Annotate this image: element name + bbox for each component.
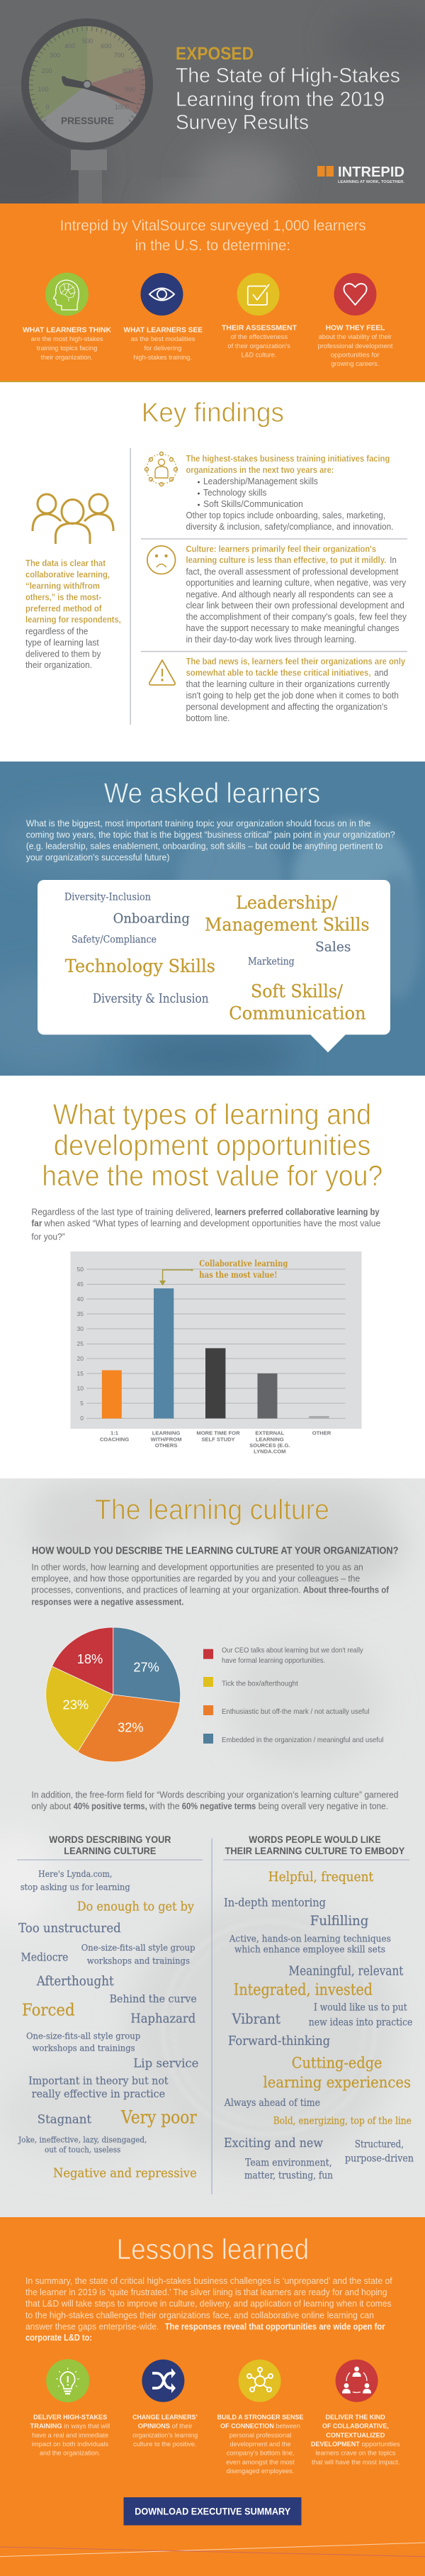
item: change learners' opinions — [132, 2360, 198, 2448]
text: culture explanation: About three-fourths of — [303, 1584, 390, 1595]
text: bad news finding: and — [374, 668, 388, 678]
item: how they feel — [317, 273, 393, 368]
column: words people would like: Bold, energizing, top of the line — [273, 2115, 412, 2126]
item: build connection — [217, 2360, 303, 2475]
text: chart intro — [31, 1208, 380, 1242]
column: words describing your learning culture: Behind the curve — [110, 1992, 197, 2005]
text: collaborative learning finding: delivered to them by — [26, 649, 101, 659]
column: words people would like: new ideas into practice — [309, 2017, 412, 2028]
text: collaborative learning finding: The data is clear that — [26, 558, 106, 568]
text: collaborative learning finding — [26, 558, 121, 670]
heading: what types of learning: development opportunities — [54, 1129, 371, 1161]
column: words people would like: In-depth mentoring — [224, 1896, 326, 1909]
text: chart intro: far — [31, 1219, 42, 1229]
column: words describing your learning culture: Haphazard — [130, 2012, 196, 2026]
heading: survey intro: in the U.S. to determine: — [135, 238, 290, 254]
pie chart: 32% — [118, 1719, 144, 1734]
item: what learners see: WHAT LEARNERS SEE — [123, 326, 203, 335]
callout: word cloud speech bubble: Diversity & Inclusion — [93, 991, 209, 1006]
heading: survey intro — [60, 218, 366, 254]
callout: collaborative learning: Collaborative learning — [199, 1259, 288, 1269]
item: how they feel: opportunities for — [331, 352, 380, 359]
heading: survey intro: Intrepid by VitalSource surveyed 1,000 learners — [60, 218, 366, 234]
legend — [203, 1646, 383, 1744]
text: survey question — [26, 818, 395, 862]
item: change learners' opinions: culture to the positive. — [133, 2441, 196, 2448]
panel: key findings — [26, 398, 407, 725]
title: Learning from the 2019 — [176, 88, 385, 111]
panel: types of learning — [31, 1098, 382, 1455]
item: how they feel: growing careers. — [331, 360, 379, 368]
text: highest-stakes initiatives: diversity & inclusion, safety/compliance, and innovation. — [186, 522, 394, 532]
text: summary: the learner in 2019 is ‘quite frustrated.’ The silver lining is that learners are ready for and hoping — [26, 2287, 387, 2297]
item: deliver high-stakes training: in ways that will — [64, 2423, 110, 2431]
icon: head with brain — [54, 280, 79, 310]
legend: Our CEO talks about learning but we don't really — [222, 1646, 363, 1655]
text: highest-stakes initiatives: Other top topics include onboarding, sales, marketing, — [186, 511, 385, 520]
text: collaborative learning finding: “learning with/from — [26, 581, 100, 591]
text: culture finding: negative. And although nearly all respondents can see a — [186, 589, 394, 599]
text: free-form field summary: In addition, the free-form field for “Words describing your organization’s learning culture” garnered — [31, 1790, 398, 1800]
column: words describing your learning culture: Important in theory but not — [28, 2074, 169, 2087]
chart category labels: LEARNING — [256, 1437, 284, 1442]
heading: lessons learned: Lessons learned — [116, 2233, 309, 2265]
legend: Tick the box/afterthought — [222, 1680, 298, 1688]
title: The State of High-Stakes — [176, 65, 400, 87]
item: change learners' opinions: of their — [172, 2423, 193, 2431]
text: collaborative learning finding: regardless of the — [26, 626, 88, 636]
bar chart: 20 — [77, 1355, 84, 1362]
item: their assessment: L&D culture. — [242, 352, 276, 359]
heading: what types of learning: have the most value for you? — [42, 1159, 382, 1192]
text: culture finding — [186, 544, 407, 645]
item: change learners' opinions: organization’s learning — [132, 2431, 198, 2439]
item: what learners think: WHAT LEARNERS THINK — [23, 326, 111, 335]
text: summary: answer these gaps enterprise-wide. — [26, 2321, 159, 2331]
item: what learners see: high-stakes training. — [133, 354, 192, 362]
chart category labels: SOURCES (E.G. — [249, 1442, 290, 1449]
text: chart intro: when asked “What types of learning and development opportunities have the most value — [43, 1219, 380, 1229]
chart category labels: 1:1 — [110, 1430, 119, 1437]
column: words people would like: WORDS PEOPLE WOULD LIKE — [249, 1834, 381, 1845]
text: highest-stakes initiatives: The highest-stakes business training initiatives facing — [186, 454, 390, 464]
text: bad news finding: somewhat able to tackle these critical initiatives, — [186, 668, 371, 678]
column: words people would like: purpose-driven — [345, 2153, 414, 2165]
item: how they feel: HOW THEY FEEL — [326, 323, 385, 332]
bar: 1:1 coaching — [102, 1370, 122, 1418]
text: summary: corporate L&D to: — [26, 2332, 92, 2343]
icon: pressure gauge — [21, 18, 153, 203]
item: their assessment: THEIR ASSESSMENT — [222, 323, 298, 332]
item: deliver high-stakes training: DELIVER HIGH-STAKES — [33, 2414, 107, 2421]
text: summary: In summary, the state of critical high-stakes business challenges is ‘unprepared’ and the state of — [26, 2275, 392, 2286]
icon: pressure gauge: 700 — [113, 52, 125, 59]
icon: pressure gauge: 900 — [125, 86, 135, 93]
item: what learners see — [123, 273, 203, 362]
text: collaborative learning finding: others,” is the most- — [26, 593, 101, 603]
item: deliver high-stakes training: have a real and immediate — [32, 2431, 108, 2439]
bar: other — [309, 1416, 329, 1418]
chart category labels: OTHER — [312, 1430, 332, 1437]
text: culture finding: fact, the overall assessment of professional development — [186, 567, 399, 576]
icon: sad face — [147, 546, 176, 574]
icon: pressure gauge: 100 — [38, 86, 49, 93]
item: how they feel: about the viability of their — [319, 333, 392, 341]
bar chart: 40 — [77, 1295, 84, 1303]
icon: pressure gauge: 800 — [123, 67, 133, 74]
icon: pressure gauge: 0 — [45, 104, 50, 111]
text: bad news finding — [186, 657, 405, 723]
button: download executive summary — [123, 2497, 302, 2526]
text: chart intro: Regardless of the last type of training delivered, — [31, 1208, 212, 1217]
column: words people would like: Structured, — [355, 2139, 404, 2151]
bar chart: 50 — [77, 1266, 84, 1273]
column: words people would like: Active, hands-on learning techniques — [229, 1934, 391, 1944]
heading: the learning culture: The learning culture — [95, 1495, 329, 1526]
text: culture finding: learning culture is less than effective, to put it mildly. — [186, 555, 386, 565]
column: words people would like: Meaningful, relevant — [289, 1965, 403, 1979]
pie chart: 23% — [63, 1697, 89, 1712]
column: words describing your learning culture: Do enough to get by — [77, 1899, 195, 1914]
item: collaborative development: DEVELOPMENT — [311, 2441, 360, 2448]
text: chart intro: for you?” — [31, 1232, 65, 1242]
bar chart: 0 — [80, 1415, 84, 1422]
item: build connection: disengaged employees. — [227, 2468, 294, 2475]
item: deliver high-stakes training: impact on both individuals — [32, 2441, 108, 2448]
title: Survey Results — [176, 111, 309, 134]
column: words describing your learning culture: really effective in practice — [32, 2087, 165, 2100]
callout: word cloud speech bubble: Leadership/ — [236, 893, 338, 913]
column: words describing your learning culture: WORDS DESCRIBING YOUR — [49, 1834, 171, 1845]
callout: word cloud speech bubble: Marketing — [248, 957, 295, 968]
text: culture explanation: responses were a negative assessment. — [31, 1597, 183, 1607]
chart category labels: COACHING — [100, 1437, 129, 1442]
bar chart: 10 — [77, 1385, 84, 1392]
text: culture finding: have the support necessary to make meaningful changes — [186, 623, 400, 633]
eyebrow: exposed: EXPOSED — [176, 44, 254, 64]
callout: collaborative learning — [159, 1259, 288, 1286]
callout: word cloud speech bubble: Technology Skills — [65, 956, 215, 976]
icon: pressure gauge: 200 — [41, 67, 52, 74]
panel: survey intro — [0, 203, 425, 382]
callout: word cloud speech bubble: Safety/Compliance — [72, 934, 157, 945]
item: collaborative development: DELIVER THE KIND — [326, 2414, 385, 2421]
column: words people would like: Exciting and new — [224, 2136, 324, 2151]
icon: pressure gauge: 1000 — [115, 104, 129, 111]
text: free-form field summary: 60% negative terms — [182, 1801, 256, 1812]
text: highest-stakes initiatives: organizations in the next two years are: — [186, 465, 334, 475]
text: survey question: coming two years, the topic that is the biggest “business critical” pain point in your organization? — [26, 829, 395, 840]
bar chart: 45 — [77, 1281, 84, 1288]
chart category labels: LYNDA.COM — [254, 1449, 285, 1455]
chart category labels: LEARNING — [152, 1430, 181, 1437]
column: words people would like: which enhance employee skill sets — [234, 1945, 385, 1956]
text: survey question: (e.g. leadership, sales enablement, onboarding, soft skills – but could be anything pertinent to — [26, 840, 382, 851]
pie chart: 27% — [133, 1660, 159, 1675]
item: what learners see: as the best modalities — [131, 335, 196, 343]
item: collaborative development: OF COLLABORATIVE, — [322, 2423, 389, 2431]
chart category labels — [100, 1430, 332, 1455]
item: change learners' opinions: CHANGE LEARNERS’ — [132, 2414, 198, 2421]
column: words people would like: Forward-thinking — [228, 2034, 330, 2048]
column: words describing your learning culture: One-size-fits-all style group — [26, 2031, 141, 2041]
icon: pressure gauge: 600 — [101, 43, 111, 50]
chart category labels: EXTERNAL — [255, 1430, 285, 1437]
item: change learners' opinions: OPINIONS — [138, 2423, 170, 2431]
bar chart: 15 — [77, 1370, 84, 1377]
icon: three people — [33, 494, 113, 544]
text: collaborative learning finding: type of learning last — [26, 638, 99, 648]
bar chart: 5 — [80, 1400, 84, 1407]
item: what learners think: training topics facing — [37, 345, 97, 352]
column: words people would like: Always ahead of time — [224, 2097, 320, 2109]
text: summary — [26, 2275, 392, 2343]
text: culture finding: Culture: learners primarily feel their organization's — [186, 544, 376, 554]
item: build connection: company’s bottom line, — [227, 2450, 295, 2458]
column: words describing your learning culture: LEARNING CULTURE — [64, 1845, 156, 1856]
pie chart: 18% — [77, 1651, 103, 1666]
column: words describing your learning culture: workshops and trainings — [33, 2043, 135, 2053]
bar chart: 30 — [77, 1325, 84, 1332]
column: words describing your learning culture: Mediocre — [21, 1951, 68, 1964]
text: bad news finding: that the learning culture in their organizations currently — [186, 679, 390, 689]
panel: lessons learned — [0, 2217, 425, 2576]
column: words describing your learning culture: Lip service — [133, 2056, 198, 2070]
button: download executive summary: DOWNLOAD EXECUTIVE SUMMARY — [135, 2506, 290, 2516]
column: words describing your learning culture: Afterthought — [36, 1974, 114, 1989]
item: build connection: between — [276, 2423, 300, 2431]
item: what learners think: are the most high-stakes — [31, 335, 103, 343]
item: their assessment: of the effectiveness — [231, 333, 288, 341]
icon: pressure gauge: PRESSURE — [61, 115, 114, 126]
item: collaborative development: CONTEXTUALIZED — [326, 2431, 385, 2439]
text: culture finding: opportunities and learning culture, when negative, was very — [186, 578, 407, 588]
callout: word cloud speech bubble: Diversity-Inclusion — [64, 891, 151, 903]
column: words people would like: learning experiences — [264, 2074, 411, 2091]
column: words describing your learning culture: Joke, ineffective, lazy, disengaged, — [18, 2135, 147, 2144]
column: words describing your learning culture: Stagnant — [38, 2112, 91, 2126]
text: summary: to the high-stakes challenges their organizations face, and collaborative online learning can — [26, 2309, 374, 2320]
item: how they feel: professional development — [317, 342, 393, 350]
text: culture finding: In — [390, 555, 397, 565]
icon: pressure gauge: 500 — [82, 38, 93, 45]
bar chart: 25 — [77, 1340, 84, 1347]
heading: we asked learners: We asked learners — [104, 778, 320, 809]
column: words people would like: Vibrant — [232, 2010, 280, 2027]
text: culture finding: in their day-to-day work lives through learning. — [186, 635, 356, 645]
heading: what types of learning — [42, 1098, 382, 1192]
bar: learning with/from others — [154, 1288, 174, 1418]
column: words people would like: I would like us to put — [314, 2002, 407, 2014]
column: words describing your learning culture: workshops and trainings — [87, 1956, 190, 1966]
text: highest-stakes initiatives: Soft Skills/Communication — [203, 499, 303, 509]
panel: header — [0, 0, 425, 203]
column: words describing your learning culture: Forced — [22, 2002, 75, 2020]
column: words people would like: THEIR LEARNING CULTURE TO EMBODY — [225, 1845, 405, 1856]
icon: people in a cycle — [342, 2367, 371, 2394]
title — [176, 65, 400, 134]
icon: shuffle arrows — [152, 2373, 172, 2388]
icon: pressure gauge: 300 — [50, 52, 60, 59]
text: survey question: your organization's successful future) — [26, 852, 170, 862]
item: what learners see: for delivering — [144, 345, 181, 352]
bar: external learning sources — [258, 1373, 278, 1418]
item: collaborative development: learners crave on the topics — [315, 2450, 396, 2458]
text: bad news finding: personal development and affecting the organization's — [186, 702, 387, 712]
column: words people would like: Cutting-edge — [292, 2055, 382, 2072]
legend: have formal learning opportunities. — [222, 1656, 325, 1665]
icon: heart — [344, 284, 367, 305]
bar: more time for self study — [205, 1348, 225, 1418]
icon: hub network — [247, 2368, 273, 2392]
text: survey question: What is the biggest, most important training topic your organization should focus on in the — [26, 818, 370, 828]
text: culture explanation — [31, 1561, 390, 1607]
item: build connection: even amongst the most — [226, 2458, 295, 2466]
item: deliver high-stakes training: TRAINING — [30, 2423, 62, 2431]
callout: word cloud speech bubble: Sales — [315, 940, 351, 955]
icon: pressure gauge: 400 — [64, 43, 75, 50]
column: words people would like: matter, trusting, fun — [244, 2170, 333, 2182]
legend: Embedded in the organization / meaningful and useful — [222, 1736, 383, 1744]
logo: Intrepid: INTREPID — [338, 165, 404, 180]
column: words describing your learning culture: out of touch, useless — [45, 2145, 121, 2154]
callout: word cloud speech bubble: Onboarding — [113, 912, 190, 927]
text: highest-stakes initiatives: Leadership/Management skills — [203, 476, 318, 486]
text: culture finding: clear link between their own professional development and — [186, 601, 404, 610]
column: words people would like — [223, 1834, 414, 2182]
text: culture explanation: employee, and how those opportunities are regarded by you and your colleagues – the — [31, 1573, 360, 1583]
text: highest-stakes initiatives: Technology skills — [203, 488, 266, 498]
icon: eye — [149, 288, 174, 301]
column: words people would like: Fulfilling — [310, 1913, 368, 1929]
callout: word cloud speech bubble: Management Skills — [205, 914, 370, 935]
legend: Enthusiastic but off-the mark / not actually useful — [222, 1707, 370, 1716]
item: deliver high-stakes training — [30, 2359, 110, 2458]
column: words describing your learning culture: Here's Lynda.com, — [38, 1868, 112, 1879]
pie chart — [46, 1627, 181, 1762]
chart category labels: WITH/FROM — [151, 1437, 182, 1442]
text: collaborative learning finding: preferred method of — [26, 603, 102, 613]
column: words describing your learning culture: stop asking us for learning — [21, 1882, 130, 1892]
item: collaborative development: opportunities — [361, 2441, 400, 2448]
callout: word cloud speech bubble: Communication — [229, 1003, 366, 1024]
item: what learners think: their organization. — [40, 354, 93, 362]
text: free-form field summary: being overall very negative in tone. — [259, 1801, 388, 1812]
item: collaborative development — [311, 2360, 400, 2466]
column: words people would like: Team environment, — [245, 2158, 332, 2169]
text: bad news finding: bottom line. — [186, 713, 230, 723]
column: words describing your learning culture: Very poor — [120, 2107, 197, 2127]
item: what learners think — [23, 272, 111, 362]
text: culture finding: the accomplishment of their company's goals, few feel they — [186, 612, 407, 622]
icon: light bulb — [56, 2368, 79, 2394]
text: free-form field summary — [31, 1790, 398, 1812]
text: chart intro: learners preferred collaborative learning by — [215, 1208, 380, 1217]
item: build connection: personal professional — [230, 2431, 291, 2439]
item: build connection: BUILD A STRONGER SENSE — [217, 2414, 303, 2421]
icon: person in network — [144, 452, 177, 486]
logo: Intrepid — [317, 165, 405, 184]
column: words describing your learning culture: Negative and repressive — [53, 2166, 197, 2181]
text: free-form field summary: with the — [149, 1801, 180, 1812]
item: collaborative development: that will have the most impact. — [312, 2458, 400, 2466]
panel: the learning culture — [0, 1478, 425, 2217]
chart category labels: SELF STUDY — [201, 1437, 235, 1442]
text: free-form field summary: 40% positive terms, — [74, 1801, 147, 1812]
item: build connection: OF CONNECTION — [220, 2423, 274, 2431]
heading: what types of learning: What types of learning and — [53, 1098, 371, 1130]
item: their assessment: of their organization's — [227, 342, 290, 350]
item: build connection: development and the — [230, 2441, 291, 2448]
text: collaborative learning finding: their organization. — [26, 660, 92, 670]
text: free-form field summary: only about — [31, 1801, 72, 1812]
text: summary: The responses reveal that opportunities are wide open for — [165, 2321, 385, 2331]
callout: word cloud speech bubble — [38, 880, 390, 1052]
chart category labels: OTHERS — [155, 1442, 177, 1449]
icon: checkbox — [248, 284, 269, 305]
text: culture explanation: In other words, how learning and development opportunities are presented to you as an — [31, 1561, 363, 1572]
callout: collaborative learning: has the most value! — [199, 1270, 278, 1280]
chart category labels: MORE TIME FOR — [196, 1430, 240, 1437]
icon: warning triangle — [149, 660, 175, 685]
bar chart — [71, 1251, 361, 1455]
logo: Intrepid: LEARNING AT WORK, TOGETHER. — [338, 180, 405, 184]
column: words describing your learning culture — [17, 1834, 203, 2181]
heading: key findings: Key findings — [142, 398, 284, 428]
column: words describing your learning culture: Too unstructured — [18, 1921, 121, 1936]
column: words people would like: Helpful, frequent — [268, 1870, 374, 1885]
text: highest-stakes initiatives — [186, 454, 394, 532]
text: collaborative learning finding: learning for respondents, — [26, 615, 121, 625]
column: words describing your learning culture: One-size-fits-all style group — [81, 1943, 196, 1953]
text: collaborative learning finding: collaborative learning, — [26, 569, 110, 579]
item: deliver high-stakes training: and the organization. — [40, 2450, 101, 2458]
panel: we asked learners — [0, 762, 425, 1076]
callout: word cloud speech bubble: Soft Skills/ — [251, 981, 344, 1002]
text: culture explanation: processes, conventions, and practices of learning at your organization. — [31, 1584, 301, 1595]
item: their assessment — [222, 273, 298, 359]
bar chart: 35 — [77, 1310, 84, 1317]
text: summary: that L&D will take steps to improve in culture, delivery, and application of learning when it comes — [26, 2298, 392, 2309]
text: bad news finding: isn't going to help get the job done when it comes to both — [186, 691, 399, 701]
column: words people would like: Integrated, invested — [234, 1981, 373, 1999]
